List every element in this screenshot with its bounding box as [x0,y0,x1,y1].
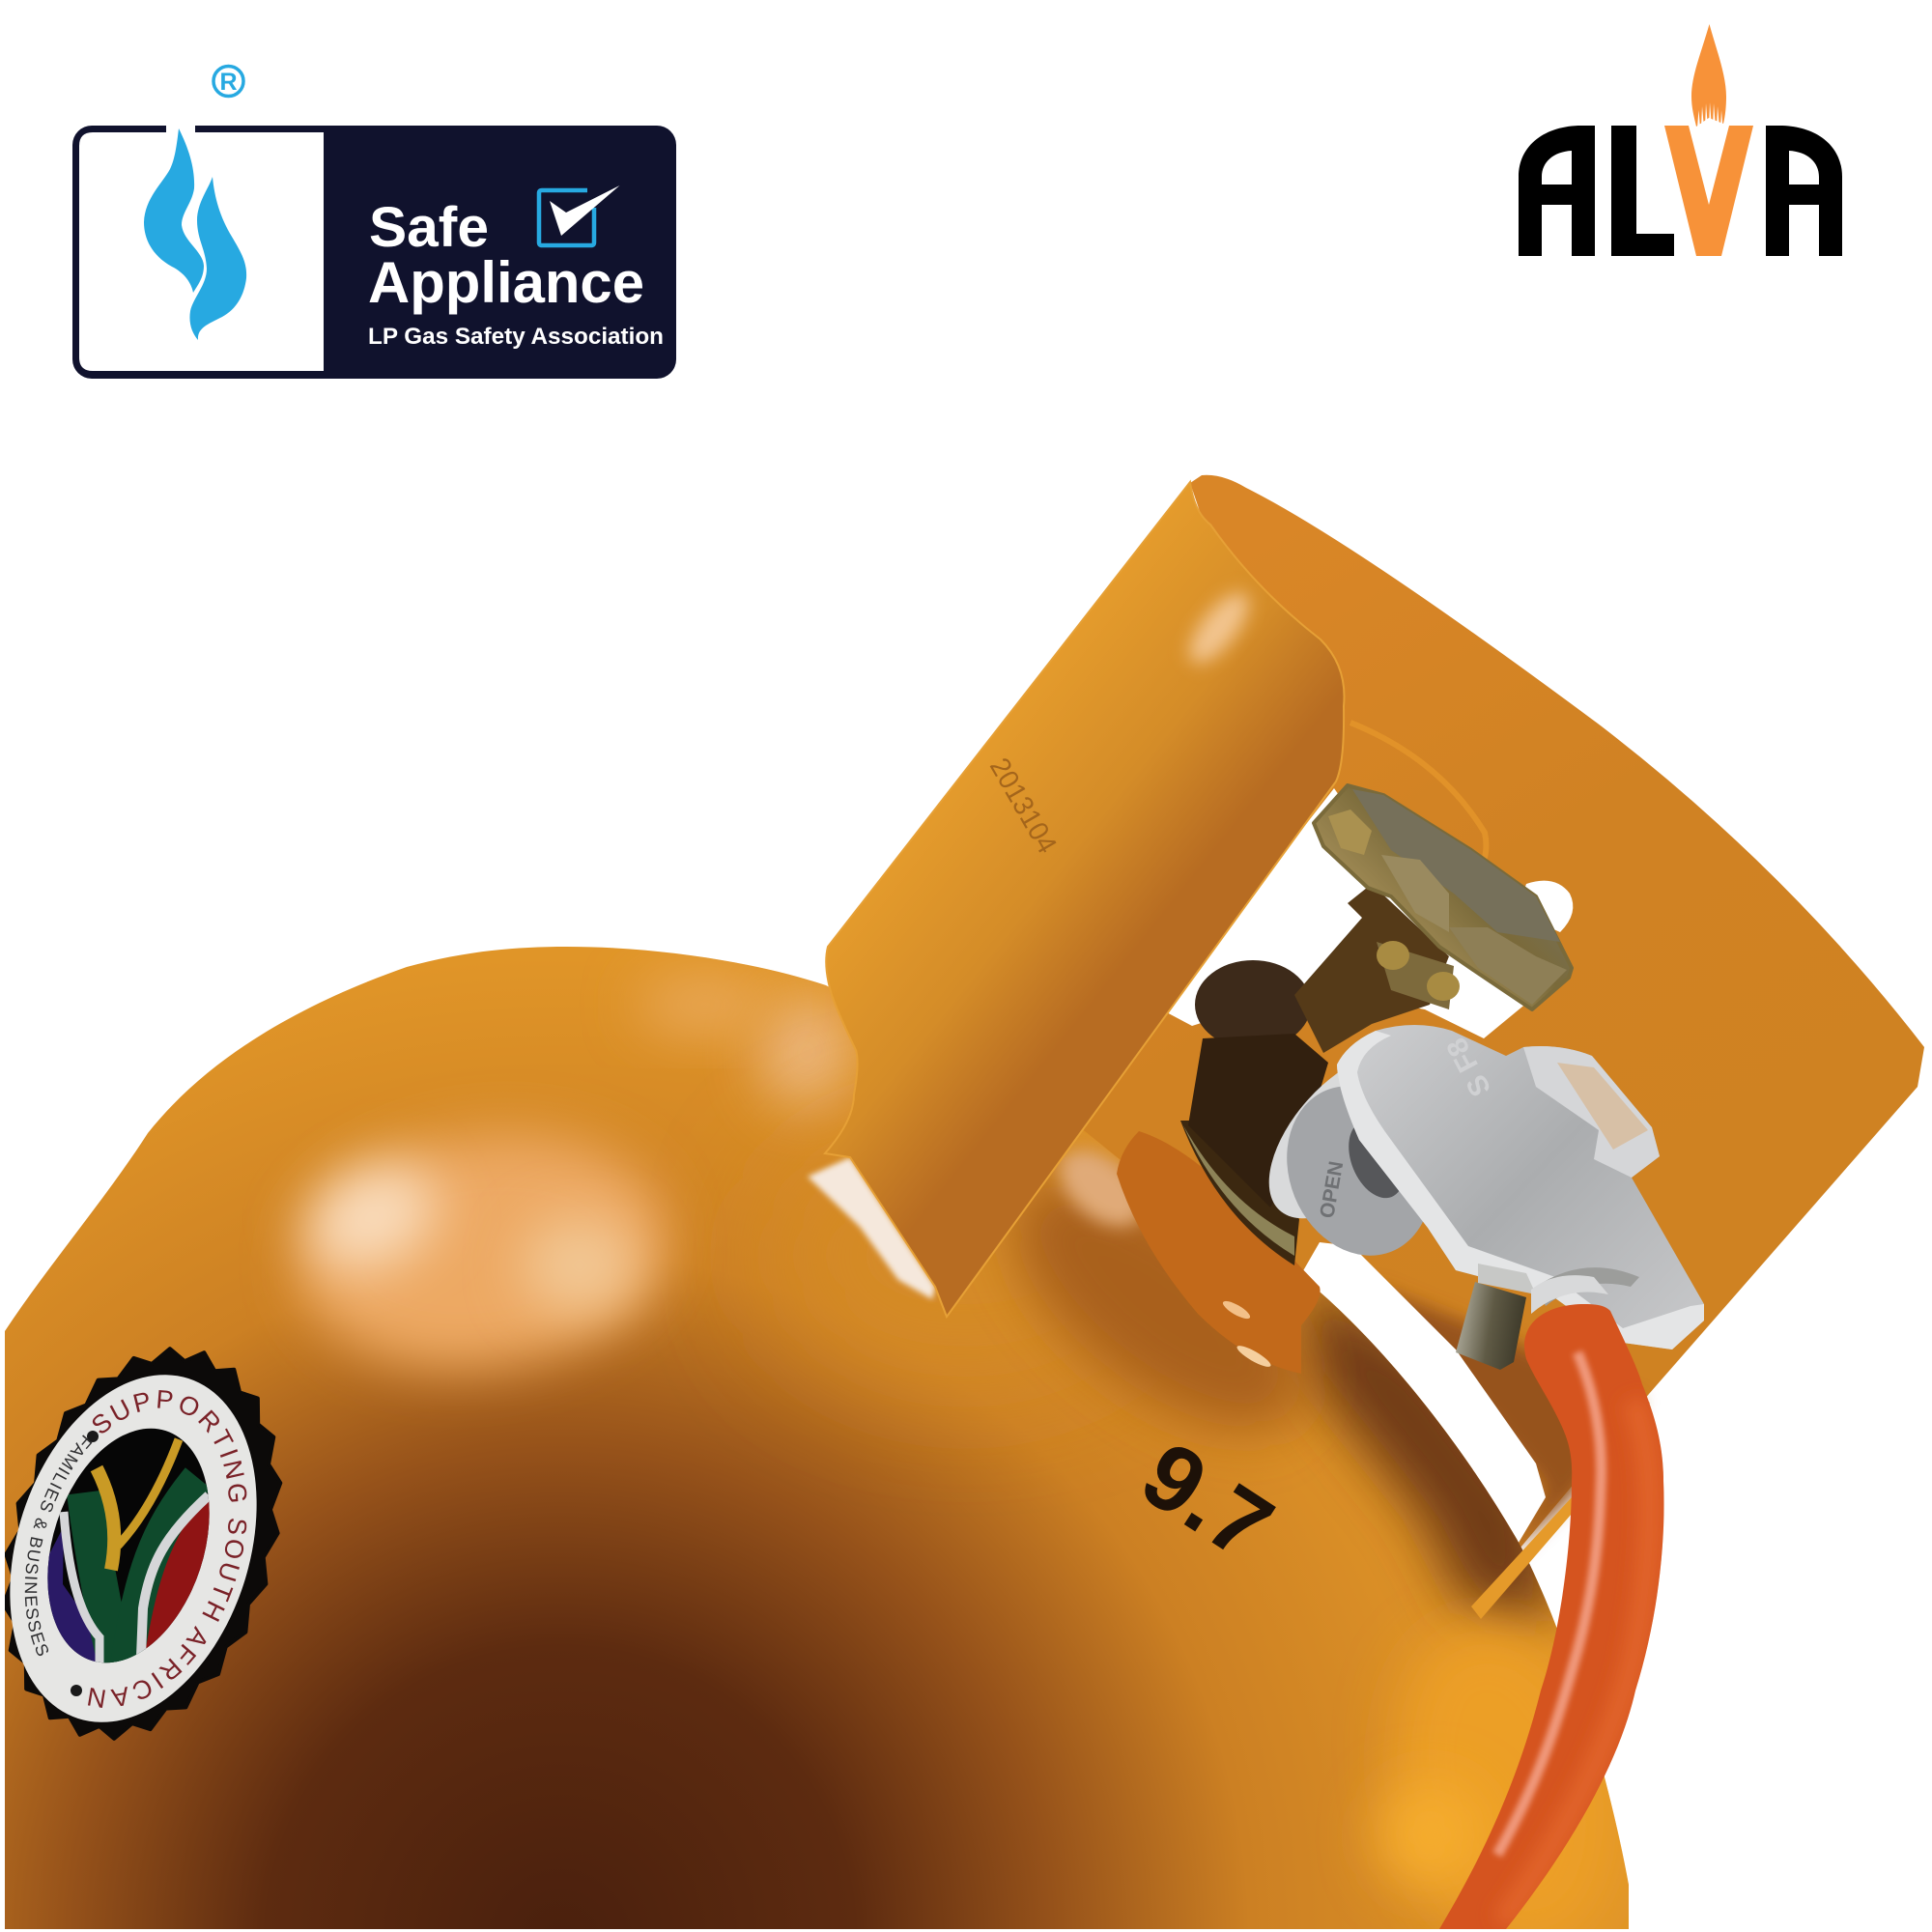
ALVA letter L [1611,126,1674,256]
regulator embossed mark: S F8 [1440,1033,1497,1101]
badge title: Safe: Safe [369,196,489,259]
collar highlights [1223,1300,1250,1320]
valve stem [1294,884,1449,1053]
knob lobes [1328,810,1372,855]
sticker dark text: FAMILIES & BUSINESSES [25,1435,93,1656]
gas regulator [1240,1024,1704,1350]
regulator label [1557,1063,1648,1150]
body gloss left [285,1111,681,1391]
shaded tail of handle [1372,1285,1642,1557]
logo: Safe Appliance badge [72,66,676,379]
border gap [166,124,195,133]
registered mark [213,66,243,97]
badge tick [550,185,620,236]
hose highlight [1497,1352,1602,1855]
shade beneath collar [996,1167,1309,1450]
cylinder body [0,927,1652,1932]
hose clamp band [1536,1267,1639,1306]
body pale shoulder [758,995,855,1111]
handle opening upper [1169,788,1523,1038]
handwheel knob [1314,785,1572,1009]
regulator ring [1240,1024,1455,1246]
embossed marking: 2013104 [983,753,1063,859]
knob top face [1352,789,1560,942]
regulator inlet disc [1263,1065,1456,1277]
sticker black scalloped edge [0,1312,328,1776]
valve rivets [1377,941,1409,970]
flag emblem [29,1420,232,1681]
blue flame left [144,128,204,293]
regulator rim [1337,1031,1704,1350]
valve upper housing [1195,960,1307,1037]
handle plate highlight [1179,583,1259,672]
registered mark: R [219,69,238,96]
badge navy panel [72,126,676,379]
valve [1188,884,1460,1208]
logo: ALVA [1519,24,1842,256]
sticker bullets [87,1431,99,1442]
inner curve of handle [1350,723,1486,881]
sticker red text: SUPPORTING SOUTH AFRICAN [88,1390,247,1708]
body gloss right [1390,1596,1629,1929]
front handle plate [825,482,1345,1317]
body shade near handle tail [1304,1275,1555,1623]
badge white panel [79,132,324,371]
ALVA letter A right [1766,126,1842,256]
valve bracket [1377,942,1454,1009]
ALVA letter V [1664,126,1753,256]
valve lower body [1188,1034,1328,1208]
handle hole [1525,881,1573,932]
white weld bead [808,1157,935,1299]
cylinder weight marking: 9.7 [1124,1421,1291,1580]
orange hose [1439,1304,1664,1929]
regulator cap [1523,1046,1660,1178]
blue flame right [189,177,246,340]
inlet disc marking: OPEN [1316,1159,1348,1220]
ALVA flame [1691,24,1726,128]
badge check box [539,190,594,245]
sticker white ring [0,1343,298,1754]
handle tail edge [1471,1399,1650,1619]
ALVA letter A [1519,126,1595,256]
badge title: Appliance: Appliance [368,250,644,315]
photo: gas cylinder with regulator and hose [5,475,1924,1929]
badge subtitle: LP Gas Safety Association [368,324,664,350]
back of the cylinder handle [1063,475,1924,1606]
sticker: supporting South African [5,1347,282,1741]
regulator main body [1337,1025,1704,1350]
handle opening lower [1301,1242,1546,1557]
clamp nut [1456,1264,1608,1370]
valve collar [1117,1121,1321,1374]
